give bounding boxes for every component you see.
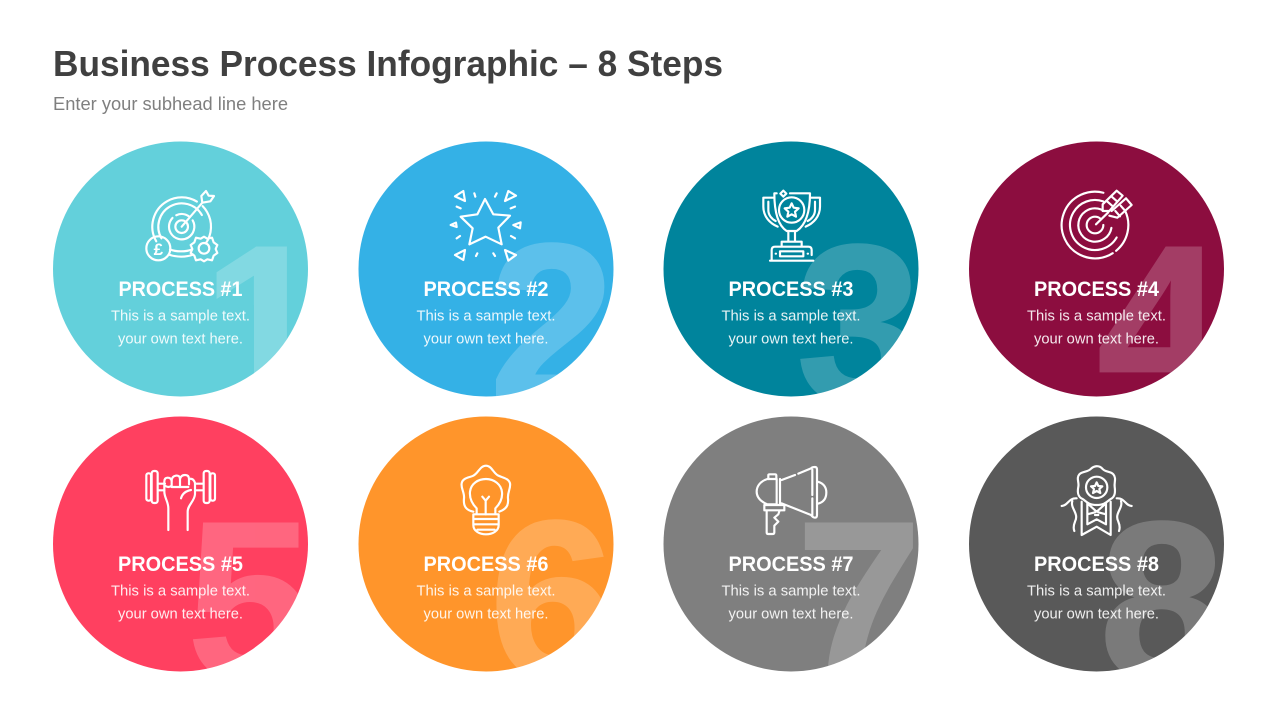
body text: your own text here. bbox=[728, 606, 854, 622]
body text: your own text here. bbox=[728, 332, 854, 348]
body text: your own text here. bbox=[118, 332, 243, 348]
icon: award badge bbox=[1062, 466, 1132, 535]
large number 4: 4 bbox=[1097, 198, 1223, 451]
body text: your own text here. bbox=[424, 606, 548, 622]
body text: This is a sample text. bbox=[416, 308, 556, 324]
body text bbox=[1027, 584, 1166, 622]
body text: your own text here. bbox=[1034, 606, 1159, 622]
panel: process 5 bbox=[53, 416, 308, 672]
heading: PROCESS #8 bbox=[1034, 553, 1159, 576]
panel: process 1 bbox=[53, 142, 308, 396]
heading: PROCESS #1 bbox=[118, 278, 243, 301]
icon: light bulb in gear bbox=[462, 466, 510, 534]
large number 8: 8 bbox=[1099, 474, 1225, 720]
heading: PROCESS #2 bbox=[424, 278, 548, 301]
body text bbox=[1027, 308, 1166, 348]
icon: star with sparkles bbox=[451, 191, 521, 261]
subtitle: Enter your subhead line here bbox=[53, 93, 288, 114]
body text bbox=[722, 308, 860, 348]
large number 3: 3 bbox=[796, 197, 922, 450]
icon: megaphone bbox=[757, 467, 826, 534]
icon: trophy bbox=[763, 191, 820, 261]
icon: bullseye with arrow bbox=[1051, 181, 1139, 269]
panel: process 8 bbox=[969, 416, 1224, 672]
icon glyph: pound sign: £ bbox=[154, 240, 164, 259]
body text bbox=[111, 584, 250, 622]
body text: This is a sample text. bbox=[111, 584, 250, 600]
body text bbox=[416, 584, 556, 622]
panel: process 6 bbox=[358, 416, 614, 672]
large number 7: 7 bbox=[796, 474, 922, 720]
panel: process 2 bbox=[358, 142, 614, 396]
heading: PROCESS #6 bbox=[424, 553, 548, 576]
heading: PROCESS #5 bbox=[118, 553, 243, 576]
title: Business Process Infographic – 8 Steps bbox=[53, 43, 723, 84]
large number 6: 6 bbox=[489, 473, 615, 720]
body text: This is a sample text. bbox=[111, 308, 250, 324]
body text: This is a sample text. bbox=[722, 584, 860, 600]
large number 1: 1 bbox=[202, 198, 328, 451]
body text: This is a sample text. bbox=[416, 584, 556, 600]
heading: PROCESS #4 bbox=[1034, 278, 1159, 301]
body text bbox=[111, 308, 250, 348]
body text: This is a sample text. bbox=[722, 308, 860, 324]
panel: process 4 bbox=[969, 142, 1224, 396]
body text bbox=[416, 308, 556, 348]
large number 2: 2 bbox=[489, 196, 615, 449]
panel: process 7 bbox=[664, 416, 918, 672]
body text: your own text here. bbox=[118, 606, 243, 622]
panel: process 3 bbox=[664, 142, 918, 396]
body text: This is a sample text. bbox=[1027, 584, 1166, 600]
body text: your own text here. bbox=[1034, 332, 1159, 348]
body text: your own text here. bbox=[424, 332, 548, 348]
large number 5: 5 bbox=[187, 474, 313, 720]
icon: target with pound coin and gear bbox=[142, 187, 222, 267]
heading: PROCESS #3 bbox=[728, 278, 854, 301]
body text: This is a sample text. bbox=[1027, 308, 1166, 324]
body text bbox=[722, 584, 860, 622]
icon: fist with dumbbell bbox=[146, 471, 215, 530]
heading: PROCESS #7 bbox=[728, 553, 854, 576]
